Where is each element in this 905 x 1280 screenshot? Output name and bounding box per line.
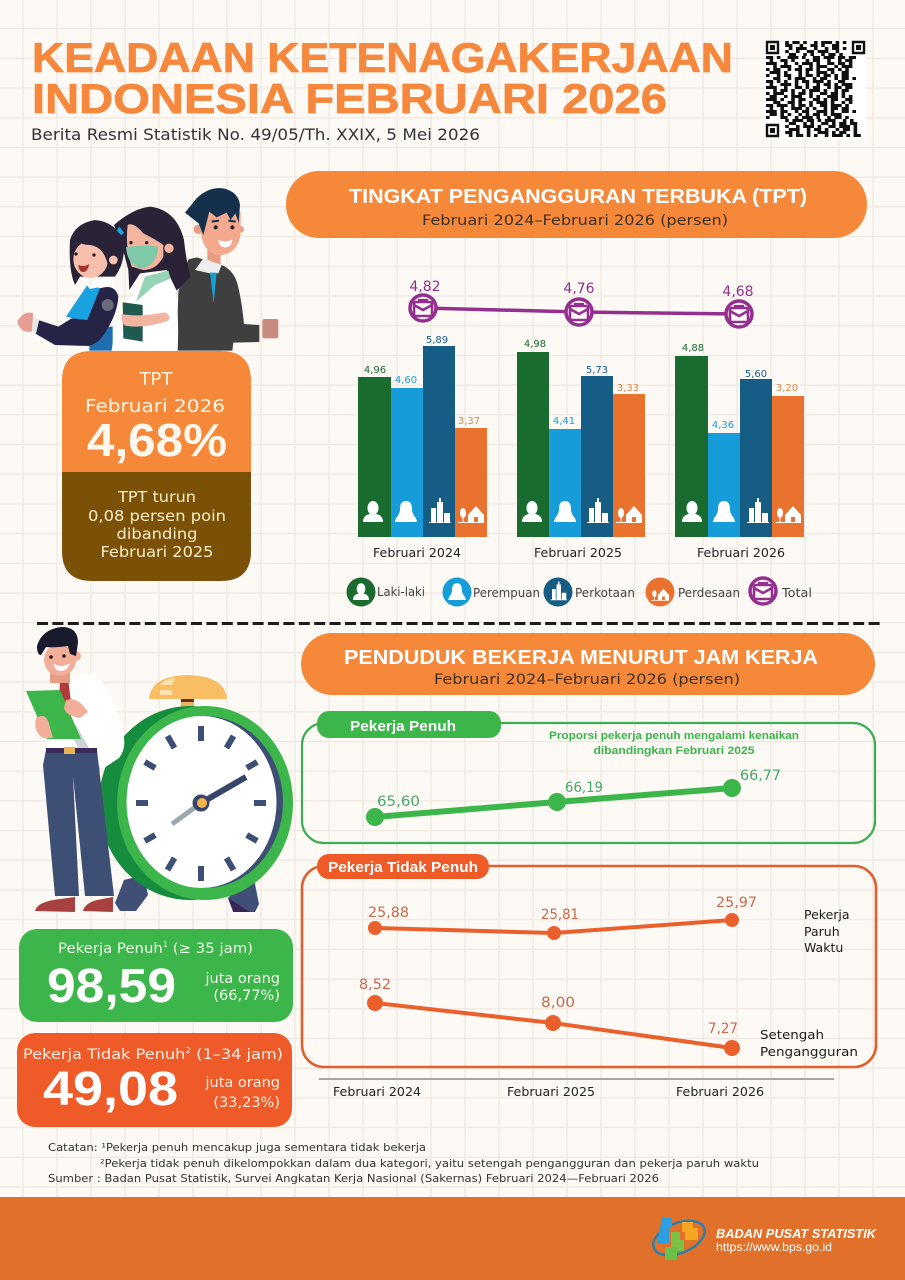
- bar chart: Februari 2025: 4,41: [553, 416, 575, 427]
- bar chart: Februari 2024: [358, 335, 487, 560]
- stat box: full-time workers: [19, 929, 293, 1022]
- notes and source: [48, 1141, 759, 1185]
- line chart: total TPT: 4,82: [409, 279, 441, 295]
- heading pill: TPT: [286, 171, 867, 238]
- legend: Perkotaan: [575, 586, 635, 600]
- x axis: Februari 2025: [507, 1085, 595, 1099]
- bar chart: Februari 2026: 3,20: [776, 383, 798, 394]
- panel: Pekerja Penuh: [302, 711, 875, 843]
- stat box: full-time workers: (≥ 35 jam): [168, 941, 253, 957]
- panel: TPT February 2026: TPT: [139, 369, 173, 390]
- standing man: [26, 627, 124, 912]
- notes and source: Catatan: ¹Pekerja penuh mencakup juga sementara tidak bekerja: [48, 1141, 426, 1154]
- bar chart: Februari 2024: 3,37: [458, 416, 480, 427]
- line chart: part-time workers: 25,81: [541, 907, 579, 923]
- stat box: not full-time workers: 49,08: [43, 1063, 178, 1116]
- BPS label: [716, 1226, 878, 1254]
- QR code: [765, 40, 866, 139]
- bar chart: Februari 2025: 4,98: [524, 339, 546, 350]
- stat box: not full-time workers: 2: [185, 1046, 191, 1055]
- panel: TPT February 2026: 4,68%: [87, 414, 227, 466]
- title: KEADAAN KETENAGAKERJAAN: [32, 34, 733, 81]
- line chart: part-time workers: [368, 895, 850, 955]
- line chart: total TPT: 4,68: [722, 284, 754, 300]
- line chart: part-time workers: Waktu: [804, 940, 843, 955]
- callout: [549, 730, 799, 757]
- stat box: not full-time workers: (33,23%): [213, 1095, 280, 1111]
- tag: Pekerja Penuh: Pekerja Penuh: [350, 719, 456, 735]
- bar chart: Februari 2026: 5,60: [745, 369, 767, 380]
- footer band: [0, 1197, 905, 1280]
- callout: Proporsi pekerja penuh mengalami kenaikan: [549, 730, 799, 742]
- line chart: part-time workers: Paruh: [804, 924, 840, 939]
- x axis: [319, 1079, 834, 1099]
- panel: TPT February 2026: dibanding: [116, 525, 198, 543]
- legend: Total: [781, 586, 812, 600]
- bar chart: Februari 2026: Februari 2026: [697, 546, 785, 560]
- line chart: full-time workers: 66,77: [740, 768, 781, 784]
- alarm clock: [99, 675, 293, 912]
- man in suit: [177, 188, 278, 351]
- bar chart: Februari 2025: Februari 2025: [534, 546, 622, 560]
- notes and source: ²Pekerja tidak penuh dikelompokkan dalam dua kategori, yaitu setengah pengangguran dan pekerja paruh waktu: [100, 1157, 759, 1170]
- x axis: Februari 2026: [676, 1085, 764, 1099]
- bar chart: Februari 2026: 4,36: [712, 420, 734, 431]
- title: [32, 34, 733, 122]
- line chart: full-time workers: [366, 768, 781, 826]
- bar chart: Februari 2025: 5,73: [586, 365, 608, 376]
- line chart: total TPT: [409, 279, 754, 327]
- line chart: part-time workers: 25,97: [716, 895, 757, 911]
- line chart: underemployed: Pengangguran: [760, 1044, 858, 1059]
- bar chart: Februari 2024: 5,89: [426, 335, 448, 346]
- illustration: three workers: [17, 188, 278, 351]
- heading pill: working hours: [301, 633, 875, 695]
- legend: Perempuan: [473, 586, 540, 600]
- bar chart: Februari 2026: [675, 343, 804, 560]
- stat box: not full-time workers: Pekerja Tidak Penuh: [23, 1047, 169, 1063]
- line chart: part-time workers: Pekerja: [804, 907, 850, 922]
- bar chart: Februari 2024: 4,60: [395, 375, 417, 386]
- stat box: full-time workers: 1: [163, 940, 168, 949]
- line chart: full-time workers: 66,19: [565, 780, 603, 796]
- bar chart: Februari 2024: 4,96: [364, 365, 386, 376]
- line chart: full-time workers: 65,60: [377, 794, 420, 810]
- panel: TPT February 2026: Februari 2025: [100, 543, 214, 561]
- line chart: underemployed: Setengah: [760, 1027, 824, 1042]
- stat box: full-time workers: juta orang: [204, 971, 280, 987]
- bar chart: Februari 2026: 4,88: [682, 343, 704, 354]
- bar chart: Februari 2024: Februari 2024: [373, 546, 461, 560]
- tag: Pekerja Penuh: [317, 711, 501, 738]
- line chart: underemployed: 7,27: [708, 1021, 738, 1037]
- stat box: full-time workers: Pekerja Penuh: [58, 941, 160, 957]
- callout: dibandingkan Februari 2025: [594, 745, 754, 757]
- panel: TPT February 2026: Februari 2026: [85, 396, 225, 417]
- x axis: Februari 2024: [333, 1085, 421, 1099]
- panel: TPT February 2026: [62, 351, 251, 581]
- heading pill: TPT: TINGKAT PENGANGGURAN TERBUKA (TPT): [349, 185, 807, 208]
- heading pill: working hours: PENDUDUK BEKERJA MENURUT JAM KERJA: [344, 647, 818, 669]
- BPS label: BADAN PUSAT STATISTIK: [716, 1226, 878, 1241]
- woman with mask: [112, 207, 191, 351]
- tag: Pekerja Tidak Penuh: Pekerja Tidak Penuh: [328, 860, 478, 876]
- stat box: not full-time workers: (1–34 jam): [191, 1047, 283, 1063]
- tag: Pekerja Tidak Penuh: [317, 854, 489, 879]
- subtitle: Berita Resmi Statistik No. 49/05/Th. XXIX, 5 Mei 2026: [31, 125, 480, 144]
- bar chart: Februari 2025: [517, 339, 645, 560]
- bar chart: Februari 2025: 3,33: [617, 383, 639, 394]
- title: INDONESIA FEBRUARI 2026: [32, 75, 667, 122]
- line chart: total TPT: 4,76: [563, 281, 595, 297]
- heading pill: working hours: Februari 2024–Februari 2026 (persen): [434, 672, 740, 688]
- line chart: underemployed: 8,52: [359, 977, 391, 993]
- stat box: not full-time workers: [17, 1033, 292, 1127]
- panel: TPT February 2026: TPT turun: [117, 488, 196, 506]
- line chart: underemployed: 8,00: [541, 995, 575, 1011]
- clock ticks: [136, 726, 266, 881]
- stat box: full-time workers: 98,59: [47, 960, 176, 1013]
- illustration: man and alarm clock: [26, 627, 293, 912]
- stat box: full-time workers: (66,77%): [213, 988, 280, 1004]
- girl with jacket: [17, 220, 124, 351]
- heading pill: TPT: Februari 2024–Februari 2026 (persen): [422, 213, 728, 229]
- legend: Laki-laki: [377, 585, 425, 599]
- stat box: not full-time workers: juta orang: [204, 1075, 280, 1091]
- legend: [346, 578, 812, 606]
- panel: TPT February 2026: 0,08 persen poin: [88, 507, 226, 525]
- line chart: underemployed: [359, 977, 858, 1059]
- BPS label: https://www.bps.go.id: [716, 1240, 832, 1254]
- notes and source: Sumber : Badan Pusat Statistik, Survei Angkatan Kerja Nasional (Sakernas) Februari 2024—Februari 2026: [48, 1172, 659, 1185]
- BPS logo: [648, 1214, 710, 1262]
- legend: Perdesaan: [678, 586, 740, 600]
- line chart: part-time workers: 25,88: [368, 905, 409, 921]
- panel: Pekerja Tidak Penuh: [302, 854, 876, 1067]
